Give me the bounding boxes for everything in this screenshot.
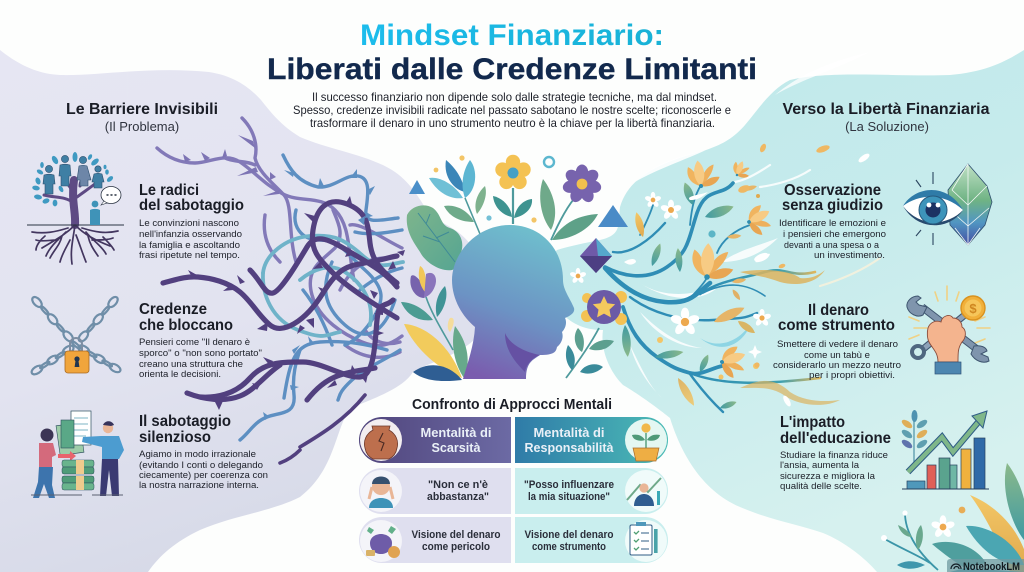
right section heading: Verso la Libertà Finanziaria <box>782 101 990 118</box>
right teal background blob <box>548 50 1024 572</box>
cuff <box>935 362 961 374</box>
text: l'impatto dell'educazione: Studiare la finanza riduce <box>780 450 888 461</box>
text: il sabotaggio silenzioso <box>139 413 268 491</box>
text: credenze che bloccano: Pensieri come "Il denaro è <box>139 337 250 348</box>
teal trunks <box>605 183 757 412</box>
gold accents near right column <box>737 143 831 368</box>
icon: crossed chains with padlock <box>30 295 122 376</box>
text: il sabotaggio silenzioso: ciecamente) per coerenza con <box>139 470 268 481</box>
plant <box>900 410 929 462</box>
icon: purse and coins <box>366 526 400 558</box>
ground line <box>27 224 124 226</box>
teal thorn vines <box>263 236 403 336</box>
thorn vines illustration <box>157 118 405 463</box>
row 2 left: quote <box>359 468 511 514</box>
text: il sabotaggio silenzioso: (evitando I conti o delegando <box>139 460 263 471</box>
thorn spikes <box>188 196 405 410</box>
text: il sabotaggio silenzioso: Il sabotaggio <box>139 413 231 430</box>
row 3 right: money as tool: come strumento <box>532 541 606 553</box>
title <box>267 19 757 86</box>
text: credenze che bloccano: Credenze <box>139 301 207 318</box>
text: osservazione senza giudizio: senza giudizio <box>782 197 883 214</box>
text: le radici del sabotaggio: frasi ripetute nel tempo. <box>139 250 240 261</box>
star flower <box>566 290 627 378</box>
icon: growth chart with books <box>900 410 989 489</box>
tree canopy leaves <box>32 152 114 206</box>
text: le radici del sabotaggio: nell'infanzia osservando <box>139 229 242 240</box>
big green leaf <box>407 205 462 270</box>
yellow flower <box>493 155 532 224</box>
text: l'impatto dell'educazione: l'ansia, aumenta la <box>780 460 860 471</box>
row 1 right: responsibility header <box>515 417 668 463</box>
text: il sabotaggio silenzioso: silenzioso <box>139 429 211 446</box>
text: osservazione senza giudizio <box>779 182 886 261</box>
text: credenze che bloccano: sporco" o "non sono portato" <box>139 348 262 359</box>
icon: clipboard and pen <box>630 522 658 555</box>
row 3 left: money as danger: come pericolo <box>422 541 490 553</box>
comparison heading: Confronto di Approcci Mentali <box>412 397 612 413</box>
text: il denaro come strumento <box>773 302 901 381</box>
icon: worried person <box>369 476 393 508</box>
row 2 right: quote: "Posso influenzare <box>524 479 614 491</box>
row 3 left: money as danger <box>359 517 511 563</box>
tulip flower left <box>410 266 436 298</box>
intro text block: Spesso, credenze invisibili radicate nel passato sabotano le nostre scelte; riconoscerle e <box>293 104 731 117</box>
books <box>907 438 985 489</box>
right section heading: (La Soluzione) <box>845 119 929 134</box>
woman <box>33 428 56 498</box>
row 1 right: responsibility header: Mentalità di <box>534 426 604 440</box>
text: il sabotaggio silenzioso: la nostra narrazione interna. <box>139 480 259 491</box>
fist <box>927 315 965 362</box>
row 1 left: scarcity header: Scarsità <box>432 441 481 455</box>
purple flower <box>540 164 602 240</box>
right side swoosh leaves <box>740 270 825 284</box>
text: l'impatto dell'educazione: L'impatto <box>780 414 845 431</box>
text: il denaro come strumento: come strumento <box>778 317 895 334</box>
rays <box>909 286 990 343</box>
left section heading: Le Barriere Invisibili <box>66 101 218 118</box>
comparison section <box>359 397 668 563</box>
lower left stem <box>426 297 453 350</box>
text: l'impatto dell'educazione: dell'educazione <box>780 430 891 447</box>
baseline <box>902 488 989 490</box>
head silhouette <box>452 225 574 379</box>
title: Liberati dalle Credenze Limitanti <box>267 53 757 86</box>
text: l'impatto dell'educazione: sicurezza e migliora la <box>780 471 876 482</box>
man <box>82 421 124 496</box>
icon: plant in pot <box>632 423 660 461</box>
text: il denaro come strumento: come un tabù e <box>804 350 870 361</box>
intro text block <box>293 91 731 130</box>
people in tree <box>43 155 104 194</box>
flowing branches: the solution <box>605 150 880 412</box>
text: osservazione senza giudizio: Osservazione <box>784 182 881 199</box>
text: l'impatto dell'educazione <box>780 414 891 492</box>
blue thorn vines <box>240 155 402 440</box>
text: credenze che bloccano: creano una struttura che <box>139 359 243 370</box>
left lavender background blob <box>0 50 490 572</box>
triangle left <box>409 180 425 194</box>
dark purple thorn vines <box>163 202 397 463</box>
title: Mindset Finanziario: <box>360 19 664 52</box>
white swoosh top right <box>775 52 870 95</box>
text: le radici del sabotaggio: la famiglia e ascoltando <box>139 240 240 251</box>
icon: family tree with roots <box>27 152 124 264</box>
text: il sabotaggio silenzioso: Agiamo in modo irrazionale <box>139 449 256 460</box>
small dots and ring <box>434 155 554 223</box>
row 2 left: quote: "Non ce n'è <box>428 479 488 491</box>
child figure <box>90 201 100 225</box>
text: osservazione senza giudizio: devanti a una spesa o a <box>784 240 880 251</box>
right section heading <box>782 101 990 134</box>
icon: silent sabotage scene <box>31 411 124 498</box>
icon: eye and crystal <box>903 164 992 245</box>
blue tulip flower <box>429 160 486 234</box>
row 1 right: responsibility header: Responsabilità <box>524 441 614 455</box>
crystal <box>948 164 992 245</box>
text: osservazione senza giudizio: un investimento. <box>814 250 885 261</box>
NotebookLM badge <box>947 559 1024 572</box>
text: le radici del sabotaggio: Le radici <box>139 182 199 199</box>
wrench two <box>912 314 966 358</box>
text: credenze che bloccano <box>139 301 262 380</box>
coin: $ <box>969 301 977 316</box>
row 3 left: money as danger: Visione del denaro <box>412 529 501 541</box>
speech bubble <box>101 186 121 205</box>
trunk and branches <box>32 176 118 264</box>
row 2 left: quote: abbastanza" <box>427 491 489 503</box>
row 3 right: money as tool: Visione del denaro <box>524 529 614 541</box>
red arrow <box>58 451 76 461</box>
row 2 right: quote <box>515 468 668 514</box>
intro text block: Il successo finanziario non dipende solo dalle strategie tecniche, ma dal mindset. <box>312 91 717 104</box>
text: credenze che bloccano: orienta le decisioni. <box>139 369 221 380</box>
left section heading <box>66 101 218 134</box>
text: credenze che bloccano: che bloccano <box>139 317 233 334</box>
eye <box>903 190 963 225</box>
eye rays <box>916 172 933 245</box>
text: il denaro come strumento: per i propri obiettivi. <box>809 370 895 381</box>
bottom right foliage <box>881 463 1024 572</box>
left section heading: (Il Problema) <box>105 119 179 134</box>
triangle, diamond and star flower <box>566 205 628 378</box>
padlock <box>65 338 89 373</box>
diamond gem <box>580 238 612 273</box>
text: il denaro come strumento: considerarlo un mezzo neutro <box>773 360 901 371</box>
icon: confident person with arrow <box>627 478 661 506</box>
central plants: left side <box>401 155 602 381</box>
text: l'impatto dell'educazione: qualità delle scelte. <box>780 481 862 492</box>
growth arrow <box>908 411 987 472</box>
text: il denaro come strumento: Il denaro <box>808 302 869 319</box>
row 2 right: quote: la mia situazione" <box>528 491 610 503</box>
intro text block: trasformare il denaro in uno strumento neutro è la chiave per la libertà finanziaria. <box>310 117 715 130</box>
row 1 left: scarcity header: Mentalità di <box>420 426 492 440</box>
soft blue and white swoosh shapes <box>630 150 778 398</box>
right side flowers and leaves <box>569 143 871 411</box>
floor lines <box>31 494 123 496</box>
money stacks <box>62 460 94 490</box>
light purple thorn vines <box>157 118 402 357</box>
lower left leaves <box>401 286 468 381</box>
icon: cracked pot <box>364 426 398 459</box>
text: il denaro come strumento: Smettere di vedere il denaro <box>777 339 898 350</box>
text: osservazione senza giudizio: i pensieri che emergono <box>783 229 886 240</box>
star flower leaves <box>566 328 614 374</box>
icon: hand with wrenches and coin <box>907 286 990 374</box>
text: osservazione senza giudizio: Identificare le emozioni e <box>779 218 886 229</box>
row 3 right: money as tool <box>515 517 668 563</box>
row 1 left: scarcity header <box>359 417 511 463</box>
text: le radici del sabotaggio <box>139 182 244 261</box>
documents <box>56 411 91 456</box>
wrench one <box>907 296 989 362</box>
roots <box>32 225 118 264</box>
text: le radici del sabotaggio: del sabotaggio <box>139 197 244 214</box>
text: le radici del sabotaggio: Le convinzioni nascono <box>139 218 239 229</box>
